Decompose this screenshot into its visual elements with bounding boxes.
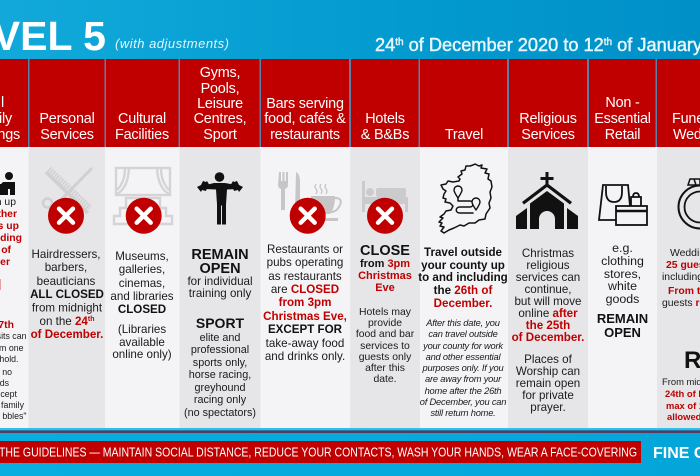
text: gyms details: horse racing, (189, 369, 251, 381)
text: retail details (597, 241, 648, 340)
icon: map of Ireland with route (439, 164, 492, 233)
subtitle: (with adjustments) (115, 36, 229, 51)
heading: social family gatherings (0, 95, 20, 143)
text: cultural details: galleries, (119, 263, 165, 276)
text: retail details: REMAIN (597, 311, 648, 326)
heading: cultural facilities: Facilities (115, 127, 169, 143)
banner: follow the guidelines (0, 441, 641, 463)
text: bars details: Christmas Eve, (263, 310, 347, 323)
text: gyms details: OPEN (199, 261, 241, 277)
text: religious details: continue, (524, 283, 572, 296)
text: cultural details: online only) (112, 348, 172, 361)
heading: bars serving food (264, 96, 346, 143)
text: travel details: are away from your (425, 374, 502, 384)
text: personal services details: beauticians (37, 275, 96, 288)
text: personal services details: from midnight (32, 302, 103, 314)
panel: social and family gatherings (0, 59, 28, 428)
text: travel details: home after the 26th (425, 386, 501, 396)
text: gatherings rules: family (1, 400, 25, 410)
text: travel details: your county up (421, 259, 505, 272)
heading: gyms pools leisure centres sport: Leisure (197, 96, 243, 112)
heading: non-essential retail: Essential (594, 111, 651, 127)
text: personal services details: Hairdressers, (32, 248, 100, 261)
heading: gyms pools leisure centres sport: Pools, (201, 81, 239, 97)
panel: funerals and weddings (657, 59, 700, 428)
text: hotels details (356, 243, 415, 385)
text: travel details: December. (434, 297, 492, 310)
text: cultural details: and libraries (110, 290, 174, 303)
text: religious details: for private (522, 389, 574, 402)
heading: hotels and b&bs: Hotels (365, 111, 405, 127)
date range: 24 (375, 35, 395, 55)
text: religious details: the 25th (526, 319, 570, 332)
text: retail details: clothing (601, 254, 644, 268)
icon: church (516, 172, 578, 229)
heading: non-essential retail: Retail (605, 127, 640, 143)
heading: funerals and weddings (672, 111, 700, 143)
heading: personal services (39, 111, 95, 143)
text: religious details: prayer. (530, 401, 566, 414)
heading: cultural facilities: Cultural (118, 111, 166, 127)
text: travel details: After this date, you (425, 318, 500, 328)
text: hotels details: services to (360, 341, 410, 352)
text: travel details: of December, you can (420, 397, 506, 407)
heading: religious services: Services (521, 127, 575, 143)
text: personal services details: barbers, (45, 261, 87, 274)
text: hotels details: after this (365, 363, 405, 374)
heading: travel: Travel (445, 127, 483, 143)
icon: diamond ring (678, 179, 700, 228)
text: personal services details: of December. (31, 328, 103, 341)
heading: religious services (519, 111, 577, 143)
text: gyms details: REMAIN (191, 247, 249, 263)
text: travel details: and other essential (426, 352, 502, 362)
text: religious details: Places of (524, 353, 573, 366)
text: hotels details: Christmas (358, 270, 412, 282)
panel: cultural facilities (105, 59, 180, 428)
text: gyms details: SPORT (196, 315, 245, 331)
text: religious details: online after (518, 307, 578, 320)
text: retail details: e.g. (612, 241, 633, 255)
text: hotels details: provide (368, 318, 402, 329)
text: cultural details: cinemas, (119, 277, 165, 290)
icon: cutlery and coffee closed (278, 172, 341, 234)
panel: gyms and sport (180, 59, 260, 428)
text: hotels details: food and bar (356, 329, 415, 340)
text: bars details: pubs operating (267, 256, 343, 269)
icon: bed closed (362, 181, 408, 234)
icon: scissors and comb closed (43, 168, 92, 234)
text: bars details: and drinks only. (265, 350, 345, 363)
icon: shopping bags (599, 185, 647, 225)
text: religious details (512, 247, 584, 414)
text: gatherings rules: of (1, 245, 12, 256)
text: bars details: as restaurants (268, 270, 342, 283)
text: hotels details: CLOSE (360, 243, 410, 259)
heading: gyms pools leisure centres sport: Sport (203, 127, 237, 143)
text: gatherings rules: no (2, 367, 12, 377)
text: cultural details: (Libraries (118, 323, 166, 336)
text: gyms details: for individual (187, 275, 253, 288)
text: bars details (263, 243, 347, 363)
panel: non-essential retail (588, 59, 657, 428)
heading: bars serving food: Bars serving (266, 96, 344, 112)
panel: travel (418, 59, 508, 428)
date range: th (395, 37, 404, 48)
date range: th (604, 37, 612, 48)
heading: bars serving food: food, cafés & (264, 111, 346, 127)
heading: non-essential retail: Non - (605, 95, 640, 111)
text: gatherings rules: ding (0, 233, 22, 244)
footer stripes (0, 428, 700, 433)
text: gyms details (184, 247, 256, 419)
heading: gyms pools leisure centres sport: Gyms, (200, 65, 240, 81)
text: gyms details: racing only (194, 394, 247, 406)
icon: person with dumbbells (197, 172, 243, 224)
text: cultural details: available (119, 336, 165, 349)
text: travel details (418, 246, 508, 418)
text: religious details: religious (526, 259, 570, 272)
date range: of January (612, 35, 700, 55)
text: hotels details: Eve (375, 282, 395, 294)
text: personal services details (30, 248, 104, 341)
text: gatherings rules (0, 197, 27, 421)
text: retail details: white (607, 279, 637, 293)
text: travel details: Travel outside (424, 246, 503, 259)
heading: social family gatherings: l (1, 95, 4, 111)
text: personal services details: th (88, 316, 94, 323)
icon: theatre closed (114, 168, 172, 234)
text: travel details: the 26th of (434, 284, 492, 297)
text: travel details: purposes only. If you (422, 363, 503, 373)
text: hotels details: from 3pm (360, 258, 410, 270)
text: bars details: from 3pm (279, 296, 331, 309)
text: personal services details: on the 24 (40, 315, 88, 328)
text: bars details: EXCEPT FOR (268, 323, 343, 336)
text: gyms details: sports only, (193, 357, 247, 369)
text: weddings details (662, 248, 700, 422)
heading: religious services: Religious (519, 111, 577, 127)
text: gyms details: professional (191, 344, 249, 356)
text: retail details: stores, (604, 267, 641, 281)
text: hotels details: guests only (359, 352, 412, 363)
heading: hotels and b&bs: & B&Bs (361, 127, 409, 143)
text: retail details: OPEN (604, 325, 641, 340)
text: travel details: to and including (418, 271, 508, 284)
heading: gyms pools leisure centres sport (194, 65, 246, 143)
text: religious details: services can (516, 271, 580, 284)
text: retail details: goods (606, 292, 639, 306)
heading: personal services: Services (40, 127, 94, 143)
panel: bars and restaurants (260, 59, 350, 428)
text: hotels details: date. (373, 374, 397, 385)
text: bars details: Restaurants or (267, 243, 343, 256)
text: religious details: Worship can (516, 365, 580, 378)
text: gatherings rules: bbles" (2, 411, 26, 421)
text: gatherings rules: er (0, 257, 10, 268)
text: religious details: but will move (514, 295, 582, 308)
heading: hotels and b&bs (361, 111, 409, 143)
text: religious details: Christmas (522, 247, 574, 260)
text: gatherings rules: cept (0, 389, 18, 399)
text: travel details: your county for work (422, 341, 504, 351)
panel: personal services (28, 59, 105, 428)
heading: non-essential retail (594, 95, 651, 143)
text: personal services details: ALL CLOSED (30, 288, 104, 301)
heading: gyms pools leisure centres sport: Centres, (194, 111, 246, 127)
text: gyms details: greyhound (194, 382, 246, 394)
text: bars details: are CLOSED (271, 283, 339, 296)
date range: of December 2020 to 12 (404, 35, 604, 55)
heading: personal services: Personal (39, 111, 95, 127)
panel: religious services (508, 59, 588, 428)
icon: people (0, 172, 15, 195)
text: travel details: still return home. (430, 408, 496, 418)
text: cultural details (110, 250, 174, 361)
panel: hotels (350, 59, 420, 428)
text: travel details: can travel outside (428, 329, 498, 339)
text: hotels details: Hotels may (359, 307, 412, 318)
heading: bars serving food: restaurants (270, 127, 340, 143)
text: gyms details: training only (189, 287, 251, 300)
text: cultural details: Museums, (115, 250, 169, 263)
text: gyms details: elite and (200, 332, 240, 344)
text: religious details: remain open (516, 377, 580, 390)
text: religious details: of December. (512, 331, 584, 344)
text: cultural details: CLOSED (118, 303, 166, 316)
text: gyms details: (no spectators) (184, 407, 256, 419)
heading: cultural facilities (115, 111, 169, 143)
text: bars details: take-away food (266, 337, 344, 350)
